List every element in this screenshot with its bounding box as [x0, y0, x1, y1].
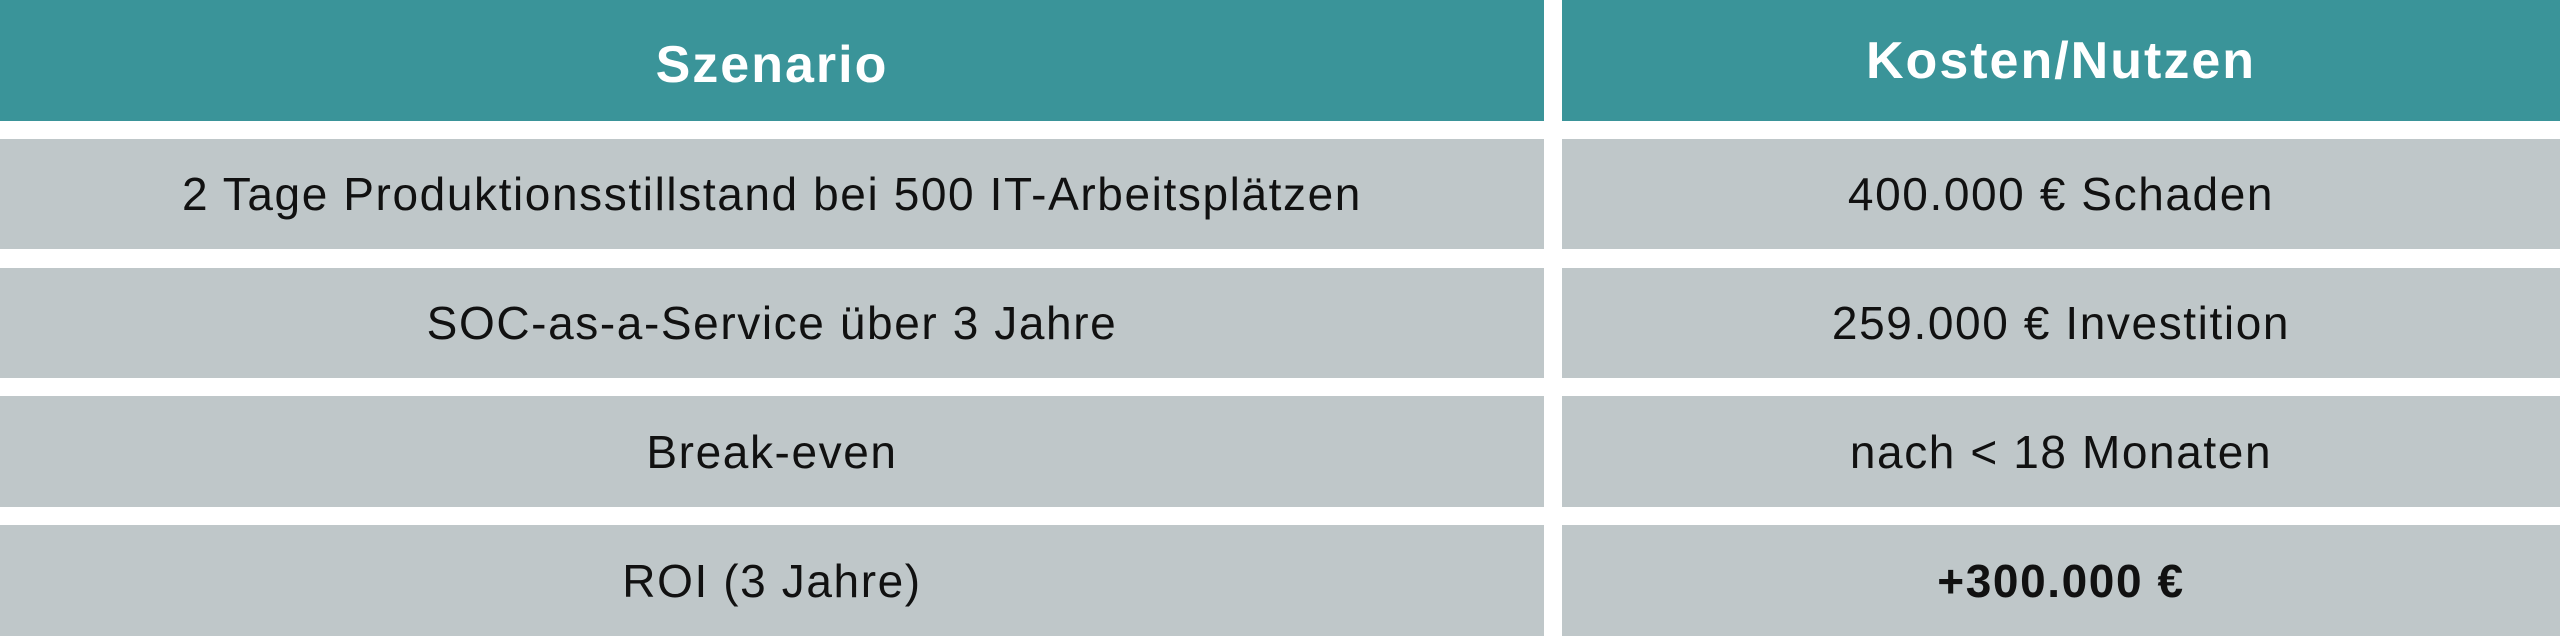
row 4 scenario [0, 525, 1544, 636]
row 2 scenario: SOC-as-a-Service über 3 Jahre [427, 297, 1117, 349]
row 2 scenario [0, 268, 1544, 378]
header: Szenario: Szenario [656, 36, 888, 94]
row 4 scenario: ROI (3 Jahre) [622, 554, 922, 606]
row 3 scenario [0, 396, 1544, 507]
row 4 value [1562, 525, 2560, 636]
row 3 scenario: Break-even [646, 426, 898, 478]
row 1 value [1562, 139, 2560, 249]
row 1 scenario: 2 Tage Produktionsstillstand bei 500 IT-Arbeitsplätzen [182, 168, 1362, 220]
header: Kosten/Nutzen [1562, 0, 2560, 121]
row 3 value [1562, 396, 2560, 507]
row 2 value [1562, 268, 2560, 378]
row 4 value: +300.000 € [1937, 554, 2185, 606]
row 1 value: 400.000 € Schaden [1848, 168, 2274, 220]
row 3 value: nach < 18 Monaten [1850, 426, 2272, 478]
row 2 value: 259.000 € Investition [1832, 297, 2290, 349]
header: Szenario [0, 0, 1544, 121]
header: Kosten/Nutzen: Kosten/Nutzen [1866, 32, 2256, 90]
row 1 scenario [0, 139, 1544, 249]
